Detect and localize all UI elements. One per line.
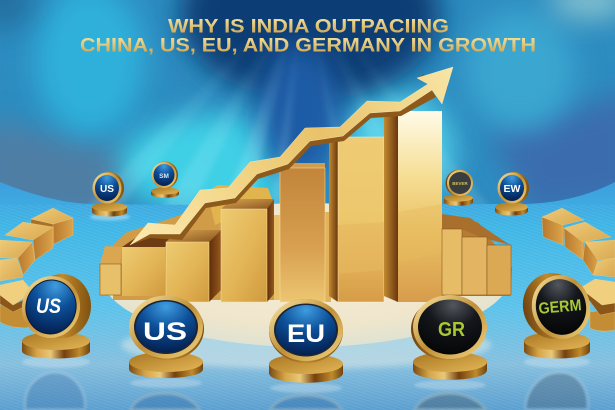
coin: small SM: SM: [159, 173, 169, 180]
bar chart: gold bars: [100, 111, 512, 302]
coin: large US left: US: [36, 295, 61, 318]
coin: small dark right: [444, 170, 473, 206]
bar 3: [166, 230, 221, 302]
coin: small US far left: [90, 172, 130, 220]
bar 2: [122, 235, 175, 296]
reflections of coins on the floor: [25, 372, 588, 410]
coin: large US left: [16, 271, 91, 368]
coin: large GERM right: [517, 267, 597, 368]
title: CHINA, US, EU, AND GERMANY IN GROWTH: [80, 36, 536, 56]
background: blue radial sky with light rays: [0, 0, 615, 240]
title: [80, 16, 536, 56]
coin: large GR: GR: [438, 319, 466, 341]
coin: small dark right: BEVER: [452, 181, 468, 186]
coin: small SM: [151, 162, 179, 198]
coin: large GERM right: GERM: [538, 297, 582, 318]
coin: large EU centre: [269, 299, 343, 393]
left gold blocks: [0, 208, 73, 328]
bar 5: [280, 163, 325, 302]
coin: large EU centre: EU: [287, 320, 325, 348]
title: WHY IS INDIA OUTPACIING: [168, 16, 449, 38]
bar 7: [384, 111, 442, 302]
bar 4: [221, 199, 274, 302]
background blocks behind bars: [113, 185, 512, 302]
bar 6: [329, 137, 384, 302]
coin: small EW right: [495, 172, 529, 216]
right gold blocks: [542, 208, 615, 331]
bar: small far left: [100, 246, 122, 295]
coin: small EW right: EW: [504, 183, 521, 195]
coin: large US centre-left: US: [143, 318, 187, 346]
coin: small US far left: US: [100, 184, 114, 195]
coin: large US centre-left: [129, 296, 204, 388]
right bars: [442, 214, 511, 295]
arrow: rising growth line: [130, 67, 453, 245]
coin: large GR: [411, 295, 487, 390]
floor: [0, 182, 615, 410]
